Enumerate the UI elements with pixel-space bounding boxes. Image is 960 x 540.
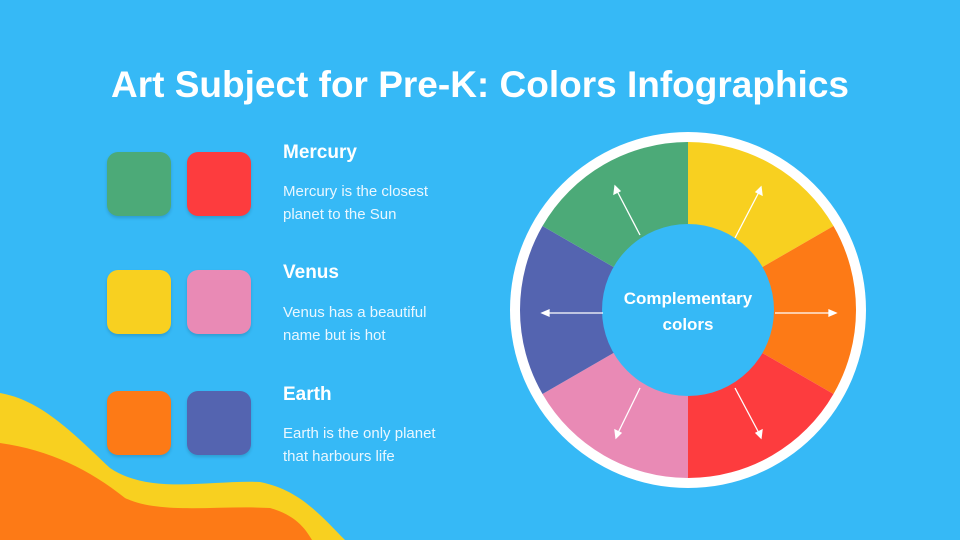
text: Venus — [283, 304, 426, 344]
swatches: earth — [106, 391, 252, 458]
text: Mercury: Mercury is the closest — [283, 183, 428, 200]
heading: Mercury: Mercury — [283, 142, 357, 163]
color wheel: colors — [662, 315, 714, 334]
swatches: mercury — [106, 152, 252, 219]
color wheel — [510, 132, 866, 488]
text: Mercury: planet to the Sun — [283, 206, 396, 223]
text: Earth: that harbours life — [283, 448, 395, 465]
title: Art Subject for Pre-K: Colors Infographics — [111, 64, 849, 105]
text: Venus: name but is hot — [283, 327, 386, 344]
text: Earth: Earth is the only planet — [283, 425, 436, 442]
swatches: venus — [106, 270, 252, 337]
heading: Venus: Venus — [283, 262, 339, 283]
color wheel: Complementary — [624, 289, 753, 308]
text: Earth — [283, 425, 436, 465]
text: Venus: Venus has a beautiful — [283, 304, 426, 321]
text: Mercury — [283, 183, 428, 223]
heading: Earth: Earth — [283, 384, 332, 405]
